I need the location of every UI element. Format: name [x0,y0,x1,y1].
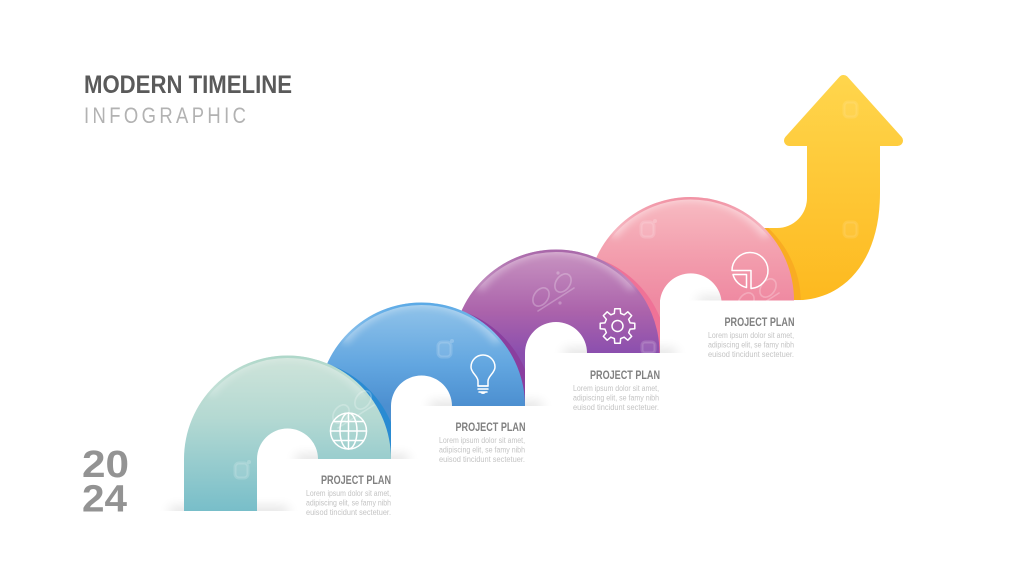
step 3 text: PROJECT PLAN [590,370,660,382]
year label: 20 [82,444,129,486]
arch 4: pink [596,197,794,353]
step 3 text: adipiscing elit, se famy nibh [573,394,659,402]
step 2 text [439,422,526,464]
year label [82,444,129,520]
step 2 text: adipiscing elit, se famy nibh [439,446,525,454]
arch 2: blue [327,302,525,458]
ground shadows [170,298,798,516]
title: INFOGRAPHIC [84,103,246,128]
title: MODERN TIMELINE [84,71,292,99]
step 4 text [708,317,794,359]
arch 3: purple [462,250,660,405]
step 1 text: euisod tincidunt sectetuer. [306,508,391,517]
step 1 text: adipiscing elit, se famy nibh [306,498,391,508]
step 1 text [306,475,391,517]
icon: gear [600,309,635,343]
step 3 text [573,370,660,412]
year label: 24 [82,478,127,520]
step 2 text: PROJECT PLAN [456,422,526,434]
icon: light bulb [471,355,495,393]
arch 1: teal [184,354,391,511]
arrow [764,75,903,300]
step 4 text: Lorem ipsum dolor sit amet, [708,331,794,340]
step 3 text: Lorem ipsum dolor sit amet, [573,384,659,393]
step 4 text: euisod tincidunt sectetuer. [708,350,794,359]
step 3 text: euisod tincidunt sectetuer. [573,403,659,412]
step 4 text: adipiscing elit, se famy nibh [708,340,794,350]
icon: globe [330,413,366,449]
title [84,71,292,128]
icon: pie chart [732,253,768,288]
step 1 text: Lorem ipsum dolor sit amet, [306,489,391,498]
step 1 text: PROJECT PLAN [321,475,391,487]
step 2 text: euisod tincidunt sectetuer. [439,455,525,464]
step 4 text: PROJECT PLAN [724,317,794,329]
step 2 text: Lorem ipsum dolor sit amet, [439,436,525,445]
